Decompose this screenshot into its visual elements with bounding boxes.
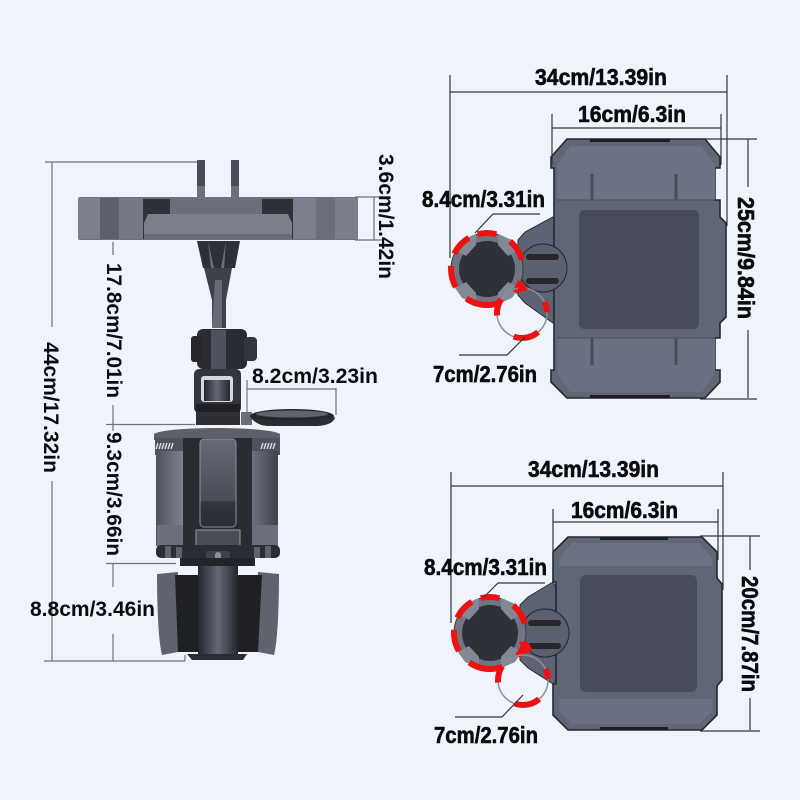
icon: cup holder bracket xyxy=(518,217,570,323)
dimension label: 8.8cm: 8.8cm/3.46in xyxy=(30,598,155,621)
dimension label: 16cm lower: 16cm/6.3in xyxy=(571,497,678,523)
dimension lines: top view small xyxy=(451,472,760,731)
dimension label: 34cm lower: 34cm/13.39in xyxy=(528,456,659,482)
icon: red dashed outline cup 8.4cm xyxy=(454,597,526,669)
icon: mount circle xyxy=(519,244,567,292)
icon: ball joint knob xyxy=(191,329,257,370)
dimension label: 25cm: 25cm/9.84in xyxy=(733,197,759,319)
dimension label: 7cm lower: 7cm/2.76in xyxy=(434,722,538,748)
dimension lines: side view xyxy=(44,162,383,661)
dimension label: 7cm: 7cm/2.76in xyxy=(433,361,537,387)
icon: cup holder expanding base xyxy=(157,566,279,660)
panel: top view large tray xyxy=(451,139,726,398)
panel: side view product xyxy=(78,160,358,660)
icon: cup holder ring xyxy=(454,597,526,669)
dimension label: 8.4cm: 8.4cm/3.31in xyxy=(422,186,545,212)
icon: cup holder bracket xyxy=(520,582,572,684)
icon: neck arm xyxy=(197,241,240,328)
dimension label: 34cm: 34cm/13.39in xyxy=(535,64,667,90)
icon: phone tray side view xyxy=(78,197,358,240)
dimension label: 8.4cm lower: 8.4cm/3.31in xyxy=(424,554,547,580)
panel: top view small tray xyxy=(454,537,722,730)
dimension lines: top view large xyxy=(450,75,757,399)
icon: small cup tray xyxy=(241,409,335,426)
icon: phone tray body xyxy=(551,139,726,398)
icon: pivot column xyxy=(194,369,241,425)
icon: mount circle xyxy=(521,609,569,657)
icon: cup holder upper body xyxy=(154,428,280,550)
dimension label: 3.6cm: 3.6cm/1.42in xyxy=(374,154,397,279)
dimension label: 44cm: 44cm/17.32in xyxy=(39,342,62,473)
icon: small ring 7cm xyxy=(498,641,548,705)
icon: cup holder ring xyxy=(451,233,523,305)
dimension label: 9.3cm: 9.3cm/3.66in xyxy=(102,432,125,556)
icon: red dashed outline cup 8.4cm xyxy=(451,233,523,305)
icon: small ring 7cm xyxy=(497,284,547,338)
dimension label: 17.8cm: 17.8cm/7.01in xyxy=(102,263,125,398)
icon: clamp prongs xyxy=(197,160,239,197)
dimension label: 20cm: 20cm/7.87in xyxy=(737,576,763,692)
dimension label: 8.2cm: 8.2cm/3.23in xyxy=(252,365,378,388)
icon: phone tray body xyxy=(553,537,722,730)
icon: adjustment ring xyxy=(156,545,280,566)
dimension label: 16cm: 16cm/6.3in xyxy=(578,101,686,127)
